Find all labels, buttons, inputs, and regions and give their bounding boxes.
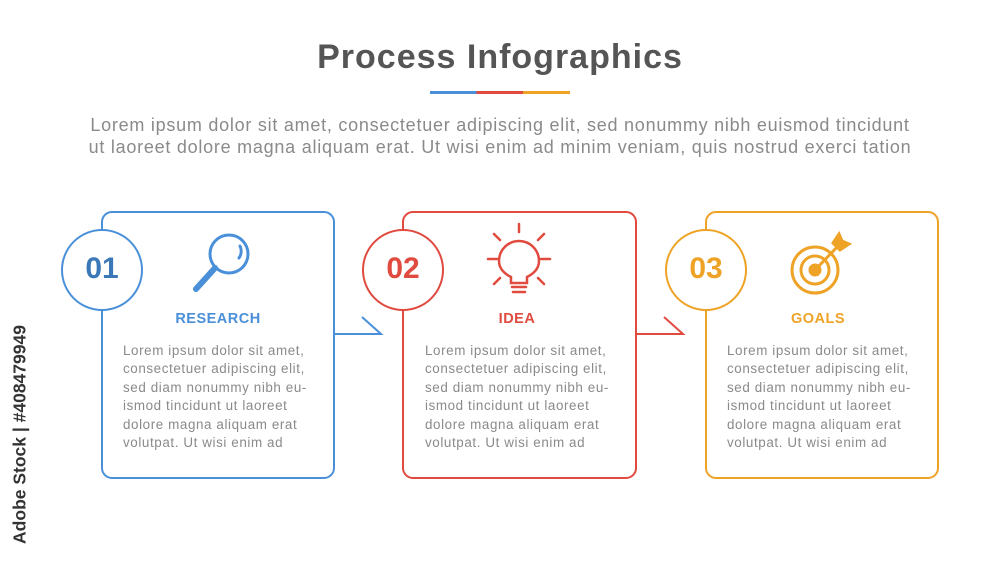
number 01: 01 — [85, 252, 119, 285]
title: Process Infographics — [317, 38, 683, 76]
title underline — [430, 91, 570, 94]
watermark: Adobe Stock | #408479949 — [10, 325, 30, 544]
icon: target — [792, 234, 849, 293]
text 2: ismod tincidunt ut laoreet — [425, 398, 589, 413]
text 1: consectetuer adipiscing elit, — [123, 361, 305, 376]
label goals: GOALS — [791, 311, 845, 327]
subtitle — [89, 115, 911, 157]
text 3: Lorem ipsum dolor sit amet, — [727, 343, 908, 358]
text 3: ismod tincidunt ut laoreet — [727, 398, 891, 413]
icon: magnifier — [196, 235, 248, 289]
number 03: 03 — [689, 252, 723, 285]
icon: lightbulb — [488, 224, 550, 292]
text 3: sed diam nonummy nibh eu- — [727, 380, 911, 395]
text 2: dolore magna aliquam erat — [425, 417, 599, 432]
label research: RESEARCH — [175, 311, 261, 327]
panel 2 frame — [363, 212, 683, 478]
text 2: volutpat. Ut wisi enim ad — [425, 435, 585, 450]
text 3: volutpat. Ut wisi enim ad — [727, 435, 887, 450]
text 2 — [425, 343, 609, 450]
subtitle: Lorem ipsum dolor sit amet, consectetuer adipiscing elit, sed nonummy nibh euismod tincidunt — [90, 115, 910, 135]
text 1: Lorem ipsum dolor sit amet, — [123, 343, 304, 358]
number 02: 02 — [386, 252, 420, 285]
label idea: IDEA — [499, 311, 535, 327]
text 1: ismod tincidunt ut laoreet — [123, 398, 287, 413]
subtitle: ut laoreet dolore magna aliquam erat. Ut wisi enim ad minim veniam, quis nostrud exerci tation — [89, 137, 911, 157]
text 3 — [727, 343, 911, 450]
text 1: volutpat. Ut wisi enim ad — [123, 435, 283, 450]
text 1: sed diam nonummy nibh eu- — [123, 380, 307, 395]
panel 3 frame — [666, 212, 938, 478]
text 1 — [123, 343, 307, 450]
text 2: Lorem ipsum dolor sit amet, — [425, 343, 606, 358]
text 2: consectetuer adipiscing elit, — [425, 361, 607, 376]
text 3: consectetuer adipiscing elit, — [727, 361, 909, 376]
panel 1 frame — [62, 212, 381, 478]
text 3: dolore magna aliquam erat — [727, 417, 901, 432]
text 2: sed diam nonummy nibh eu- — [425, 380, 609, 395]
text 1: dolore magna aliquam erat — [123, 417, 297, 432]
